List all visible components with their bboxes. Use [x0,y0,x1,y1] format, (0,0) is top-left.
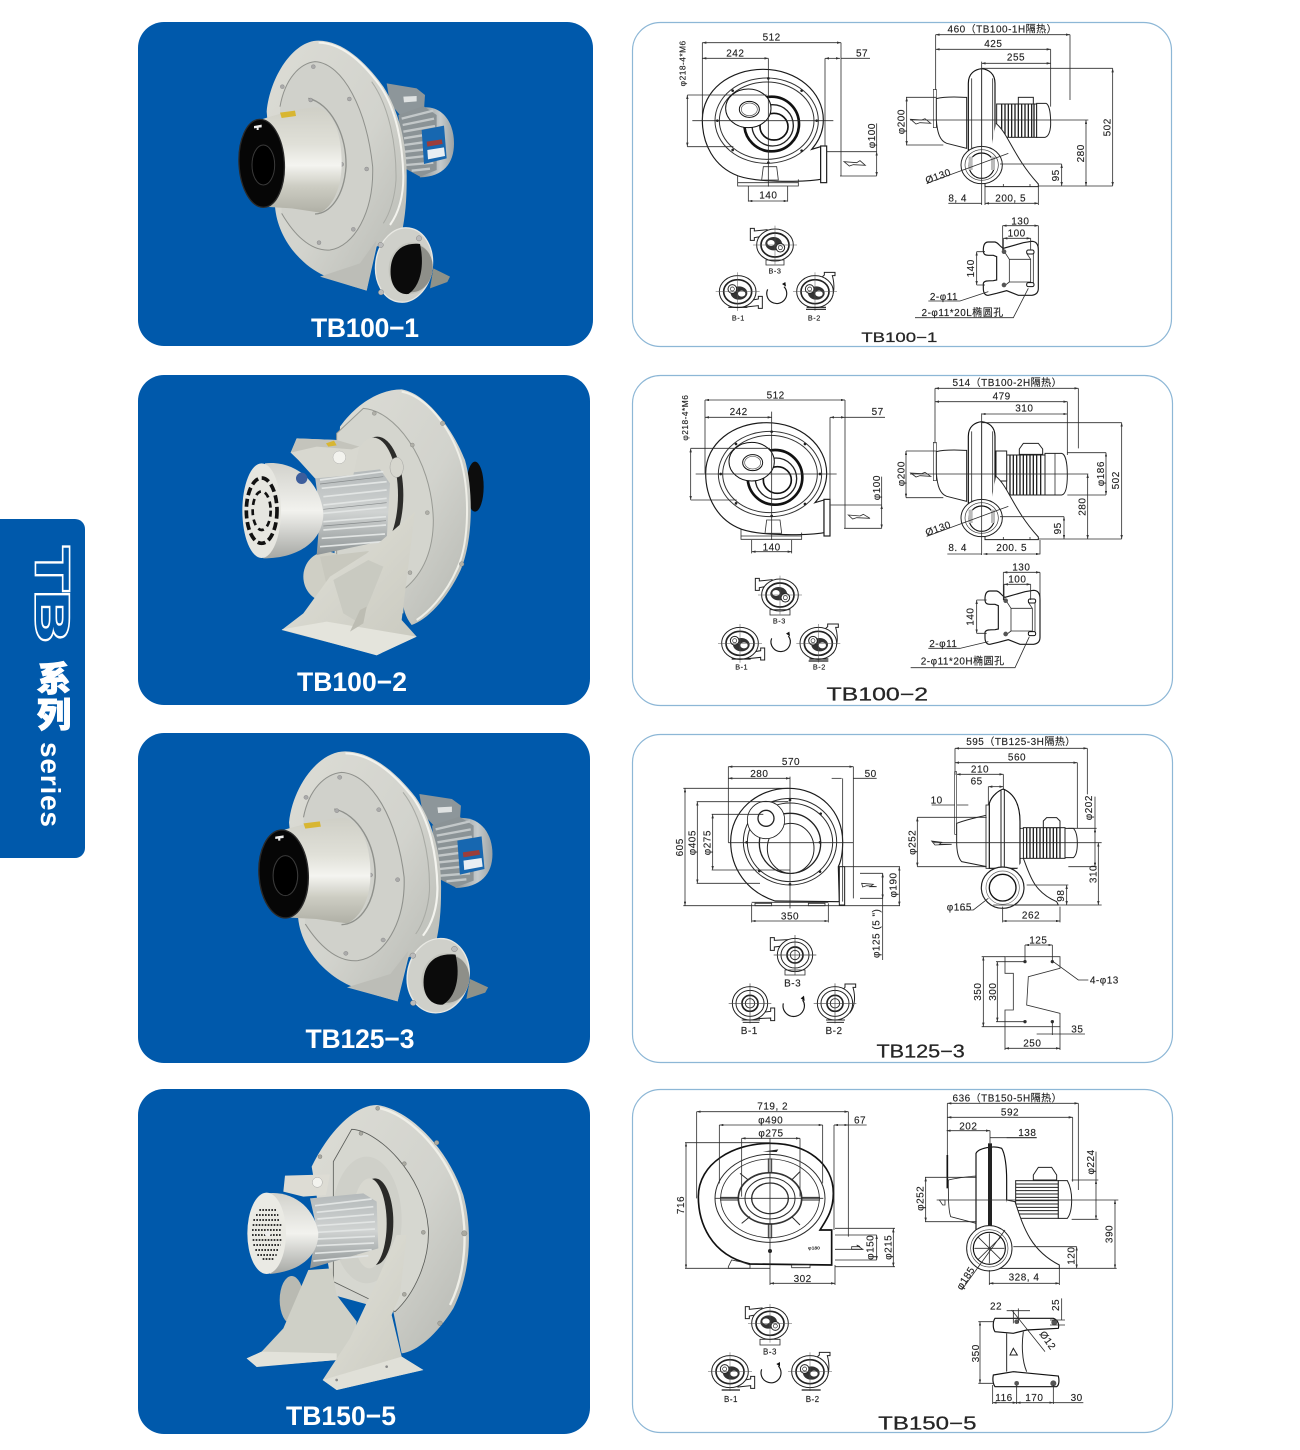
base plan TB100-2: 2-φ11 [929,639,957,650]
side view TB100-2: Ø130 [924,520,953,539]
side view TB125-3: φ252 [907,830,918,855]
base plan TB125-3 [973,935,1119,1050]
mounting orientation icons TB100-1: B-1 [732,313,745,322]
side view TB100-2: 479 [993,391,1011,402]
side view TB150-5: 120 [1067,1247,1078,1265]
mounting orientation icons TB125-3: B-1 [741,1026,758,1037]
front view TB150-5 [676,1101,895,1285]
front view TB100-1: 512 [763,33,781,44]
heading: series in Chinese: 系 [37,661,71,699]
side view TB100-2: 95 [1053,522,1064,534]
mounting orientation icons TB150-5: B-3 [763,1347,777,1356]
front view TB150-5: 302 [794,1274,812,1285]
base plan TB150-5 [971,1298,1083,1404]
side view TB150-5: 138 [1018,1128,1036,1139]
front view TB100-1 [678,33,878,202]
base plan TB150-5: 30 [1071,1393,1083,1404]
front view TB125-3: φ405 [687,830,698,855]
photo: TB150-5 blower [247,1105,469,1390]
mounting orientation icons TB125-3: B-2 [825,1026,843,1037]
side view TB100-1 [896,23,1114,205]
mounting orientation icons TB150-5: B-2 [806,1395,820,1404]
front view TB100-1: 57 [856,49,868,60]
side view TB100-2 [896,376,1122,555]
side view TB125-3: 262 [1022,910,1040,921]
base plan TB100-2: 2-φ11*20H椭圆孔 [921,654,1005,667]
front view TB150-5: φ490 [758,1115,783,1126]
label: TB100-1: TB100−1 [311,313,419,343]
panel: TB125-3 dimension drawing [632,734,1172,1062]
panel: TB series side tab [0,519,85,858]
panel: TB100-2 product photo [138,375,590,705]
base plan TB100-1: 2-φ11*20L椭圆孔 [922,306,1004,319]
front view TB125-3: φ275 [703,830,714,855]
front view TB100-1: 242 [726,48,744,59]
side view TB100-2: 280 [1078,498,1089,516]
front view TB125-3: 605 [675,838,686,856]
side view TB125-3: 98 [1056,890,1067,902]
front view TB100-2 [680,390,885,554]
front view TB150-5: 716 [676,1196,687,1214]
drawing title TB100-1: TB100−1 [861,329,938,345]
panel: TB125-3 product photo [138,733,590,1063]
heading: TB outlined letters: TB [26,547,79,642]
base plan TB100-1 [915,216,1038,319]
front view TB100-1: φ218-4*M6 [678,40,688,86]
base plan TB100-2: 130 [1012,562,1030,573]
panel: TB150-5 dimension drawing [632,1090,1172,1433]
drawing title TB125-3: TB125−3 [876,1041,965,1062]
mounting orientation icons TB150-5 [708,1304,832,1404]
front view TB125-3: 570 [782,757,800,768]
side view TB150-5 [915,1092,1118,1292]
side view TB150-5: φ224 [1086,1149,1097,1175]
side view TB100-2: 310 [1015,404,1033,415]
front view TB100-2: 512 [767,390,785,401]
mounting orientation icons TB125-3: B-3 [784,978,801,989]
mounting orientation icons TB100-2: B-1 [735,663,748,672]
base plan TB150-5: Ø12 [1037,1329,1057,1352]
front view TB100-1: φ100 [867,123,878,148]
side view TB150-5: φ252 [915,1186,926,1211]
photo: TB100-2 blower [242,389,484,655]
drawing title TB100-2: TB100−2 [826,684,928,705]
base plan TB100-1: 100 [1008,229,1026,240]
front view TB125-3: 350 [781,911,799,922]
photo: TB100-1 blower [237,41,454,306]
mounting orientation icons TB125-3 [729,935,856,1037]
side view TB100-1: 95 [1051,169,1062,181]
base plan TB125-3: 300 [988,983,999,1001]
base plan TB150-5: 22 [990,1301,1002,1312]
base plan TB150-5: 116 [995,1393,1013,1404]
heading: series in Chinese [37,661,71,735]
label: TB125-3: TB125−3 [306,1024,414,1054]
front view TB150-5: φ150 [866,1235,877,1260]
side view TB100-1: φ200 [896,109,907,134]
side view TB125-3: 560 [1008,752,1026,763]
front view TB125-3: 50 [865,769,877,780]
base plan TB100-2: 100 [1008,575,1026,586]
front view TB100-1: 140 [759,191,777,202]
side view TB100-2: 8. 4 [948,543,967,554]
mounting orientation icons TB100-1: B-2 [808,313,821,322]
heading: series in Chinese: 列 [37,697,71,735]
front view TB100-2: φ218-4*M6 [680,395,690,441]
side view TB100-2: 502 [1111,471,1122,489]
side view TB100-1: 425 [984,39,1002,50]
front view TB150-5: φ180 [808,1245,820,1251]
label: TB150-5: TB150−5 [286,1401,396,1431]
side view TB100-1: 255 [1007,53,1025,64]
side view TB125-3 [907,735,1102,922]
side view TB100-1: 502 [1103,118,1114,136]
base plan TB150-5: 350 [971,1344,982,1362]
mounting orientation icons TB100-2: B-3 [773,617,786,626]
side view TB100-2: φ200 [896,461,907,486]
front view TB125-3: φ125 (5 ") [872,909,883,958]
photo: TB125-3 blower [257,751,492,1017]
base plan TB150-5: 25 [1051,1299,1062,1311]
side view TB150-5: 390 [1105,1225,1116,1243]
side view TB150-5: 592 [1001,1108,1019,1119]
panel: TB100-2 dimension drawing [632,376,1172,706]
side view TB100-2: φ186 [1096,461,1107,486]
base plan TB100-1: 130 [1011,216,1029,227]
side view TB100-1: Ø130 [924,167,953,187]
side view TB125-3: 10 [931,796,943,807]
base plan TB150-5: 170 [1025,1393,1043,1404]
side view TB150-5: 328, 4 [1009,1273,1039,1284]
side view TB125-3: φ165 [947,902,972,913]
mounting orientation icons TB150-5: B-1 [724,1395,738,1404]
base plan TB125-3: 350 [973,983,984,1001]
base plan TB125-3: 250 [1023,1039,1041,1050]
front view TB150-5: 719, 2 [757,1101,788,1112]
panel: TB100-1 dimension drawing [632,22,1172,346]
mounting orientation icons TB100-1: B-3 [769,267,781,276]
mounting orientation icons TB100-2: B-2 [813,663,826,672]
side view TB125-3: φ202 [1084,795,1095,820]
side view TB125-3: 65 [971,776,983,787]
side view TB150-5: 202 [959,1121,977,1132]
front view TB125-3 [675,757,900,960]
base plan TB125-3: 4-φ13 [1090,975,1119,986]
heading: series: series [35,742,66,827]
base plan TB125-3: 35 [1071,1024,1083,1035]
base plan TB125-3: 125 [1029,935,1047,946]
mounting orientation icons TB100-1 [716,226,837,322]
side view TB100-1: 460（TB100-1H隔热） [948,23,1057,36]
side view TB100-2: 514（TB100-2H隔热） [953,376,1062,389]
side view TB100-1: 280 [1076,144,1087,162]
base plan TB100-2: 140 [966,608,977,626]
drawing title TB150-5: TB150−5 [878,1412,976,1433]
panel: TB100-1 product photo [138,22,593,346]
side view TB100-1: 200, 5 [995,193,1026,204]
label: TB100-2: TB100−2 [297,667,407,697]
front view TB150-5: φ275 [758,1129,784,1140]
front view TB100-2: 140 [763,543,781,554]
front view TB150-5: φ215 [883,1235,894,1260]
front view TB125-3: φ190 [888,872,899,898]
side view TB125-3: 210 [971,764,989,775]
front view TB100-2: 57 [872,407,884,418]
base plan TB100-1: 2-φ11 [930,292,958,303]
side view TB150-5: 636（TB150-5H隔热） [953,1092,1062,1105]
panel: TB150-5 product photo [138,1089,590,1434]
front view TB125-3: 280 [750,769,768,780]
front view TB100-2: φ100 [872,475,883,500]
front view TB100-2: 242 [730,407,748,418]
side view TB100-1: 8, 4 [948,193,967,204]
side view TB100-2: 200. 5 [996,543,1027,554]
side view TB125-3: 595（TB125-3H隔热） [966,735,1076,748]
base plan TB100-1: 140 [966,259,977,277]
mounting orientation icons TB100-2 [718,576,840,672]
base plan TB100-2 [911,562,1040,668]
front view TB150-5: 67 [854,1116,866,1127]
side view TB150-5: φ185 [955,1265,978,1292]
side view TB125-3: 310 [1088,865,1099,883]
